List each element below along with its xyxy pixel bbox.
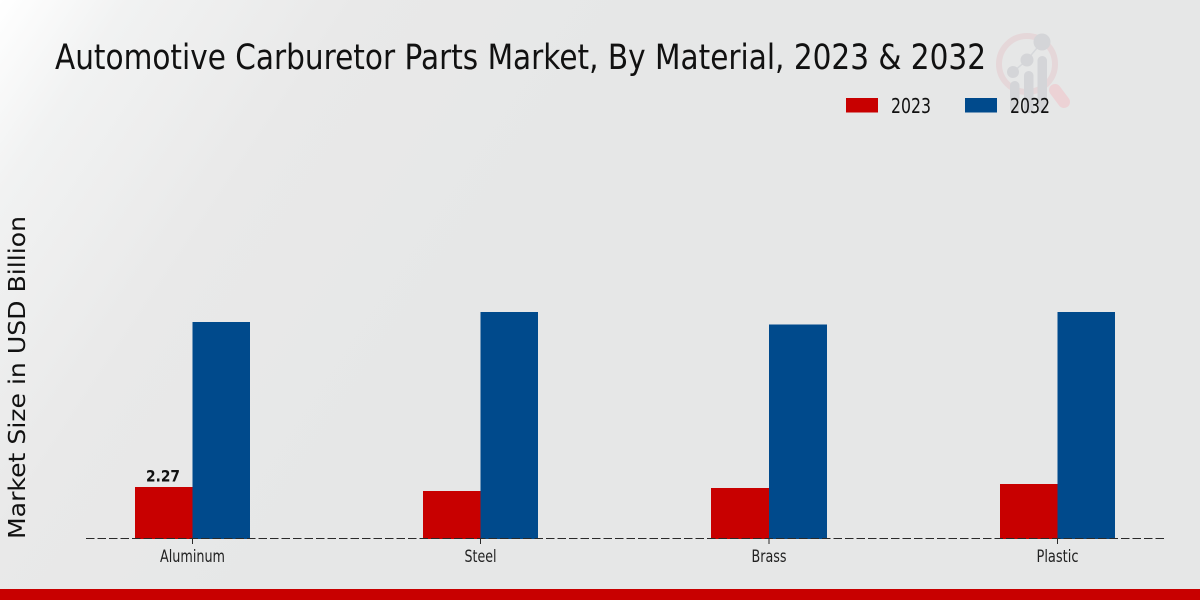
bars: Brass	[711, 324, 827, 539]
x axis baseline	[86, 538, 1164, 544]
category label: Aluminum: Aluminum	[160, 547, 225, 566]
legend	[846, 94, 1050, 118]
category label: Plastic: Plastic	[1036, 547, 1078, 566]
legend item: 2032: 2032	[1010, 94, 1050, 118]
category label: Brass: Brass	[752, 547, 786, 566]
data label: 2.27: 2.27	[146, 466, 180, 486]
y axis label: Market Size in USD Billion	[5, 216, 31, 539]
category label: Steel: Steel	[464, 547, 496, 566]
bars: Aluminum	[135, 322, 250, 539]
bars: Steel	[423, 312, 538, 539]
legend item: 2023	[846, 94, 931, 118]
icon: watermark logo	[999, 34, 1064, 113]
footer bar	[0, 589, 1200, 600]
title: Automotive Carburetor Parts Market, By Material, 2023 & 2032	[55, 38, 986, 78]
legend item: 2023: 2023	[891, 94, 931, 118]
bars: Plastic	[1000, 312, 1115, 539]
legend item: 2032	[965, 94, 1050, 118]
